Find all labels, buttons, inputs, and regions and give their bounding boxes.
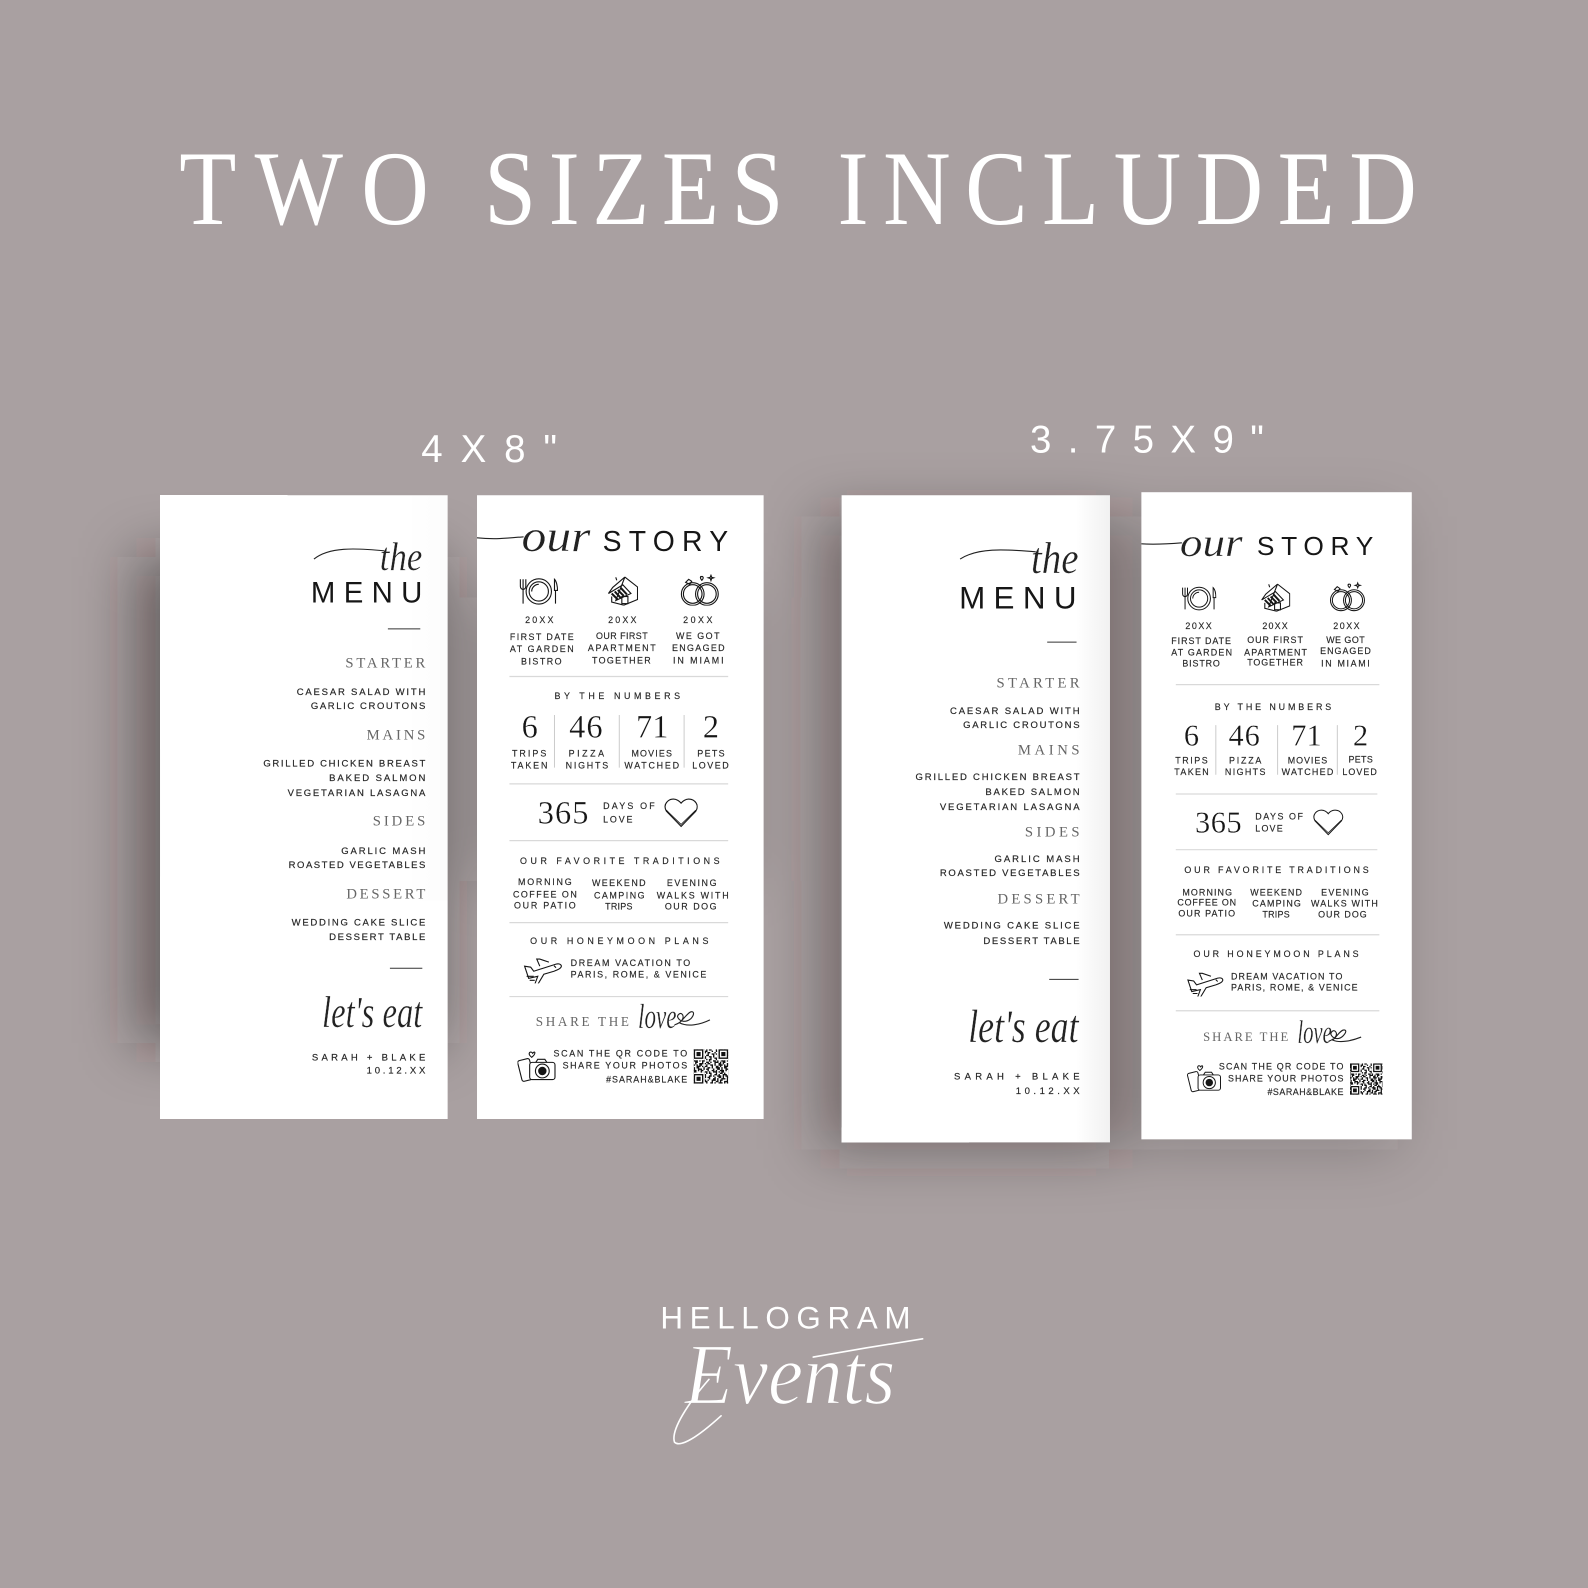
script heading: the: the <box>380 534 422 579</box>
menu items: GARLIC CROUTONS <box>963 720 1080 731</box>
numbers row: 71 <box>1291 718 1322 752</box>
size label: 4x8: 4X8" <box>421 428 557 471</box>
numbers row <box>511 709 729 771</box>
days of love: 365 <box>538 795 588 831</box>
logo wordmark: HELLOGRAM <box>660 1301 910 1336</box>
heading: our story: STORY <box>603 526 728 558</box>
milestones: AT GARDEN <box>1171 647 1232 657</box>
milestones: FIRST DATE <box>1171 636 1231 646</box>
names and date: 10.12.XX <box>1016 1086 1080 1097</box>
card background <box>842 495 1110 1142</box>
traditions: TRIPS <box>605 901 633 911</box>
days of love: DAYS OF <box>603 801 655 811</box>
menu items <box>916 676 1080 947</box>
script: let's eat: let's eat <box>968 1001 1079 1053</box>
menu items: GRILLED CHICKEN BREAST <box>263 759 426 770</box>
milestones: ENGAGED <box>1320 646 1371 656</box>
numbers row: PIZZA <box>1229 756 1261 766</box>
share the love: love <box>638 998 677 1036</box>
icon: plane <box>1188 973 1223 997</box>
size label: 3.75x9: 3.75X9" <box>1030 419 1264 462</box>
qr instructions: SCAN THE QR CODE TO <box>553 1048 687 1058</box>
milestones <box>510 615 725 666</box>
icon: rings <box>681 575 718 605</box>
traditions: EVENING <box>667 878 717 888</box>
icon: plane <box>525 959 561 984</box>
milestones: FIRST DATE <box>510 632 574 642</box>
menu items: CAESAR SALAD WITH <box>950 706 1080 717</box>
script heading: the <box>314 534 422 579</box>
menu items: SIDES <box>373 813 425 829</box>
menu items: MAINS <box>367 727 425 743</box>
heading: menu: MENU <box>959 581 1077 616</box>
traditions <box>1177 865 1378 920</box>
qr code <box>1334 1063 1383 1095</box>
icon: rings <box>1330 583 1364 611</box>
menu items: DESSERT TABLE <box>329 932 425 943</box>
traditions: WALKS WITH <box>1311 898 1378 908</box>
milestones: 20XX <box>1262 621 1288 631</box>
days of love <box>538 795 655 831</box>
qr instructions: #SARAH&BLAKE <box>1267 1087 1343 1097</box>
menu items: ROASTED VEGETABLES <box>289 860 425 871</box>
qr instructions <box>1219 1061 1343 1097</box>
traditions: OUR FAVORITE TRADITIONS <box>520 856 720 866</box>
logo: hellogram events <box>660 1301 923 1444</box>
numbers row: 71 <box>636 709 668 745</box>
traditions: OUR DOG <box>1318 910 1367 920</box>
numbers row: TAKEN <box>511 761 547 771</box>
traditions: OUR PATIO <box>514 900 576 910</box>
milestones: OUR FIRST <box>596 631 648 641</box>
heading: our story: our <box>522 511 591 561</box>
share the love: SHARE THE <box>1203 1030 1288 1044</box>
milestones: IN MIAMI <box>673 655 724 665</box>
menu items: BAKED SALMON <box>329 773 425 784</box>
milestones: ENGAGED <box>672 643 725 653</box>
traditions: CAMPING <box>1252 898 1301 908</box>
icon: house <box>1262 584 1290 611</box>
panel: 4x8 menu card <box>160 495 448 1119</box>
traditions: WALKS WITH <box>657 890 729 900</box>
menu items: MAINS <box>1018 743 1080 759</box>
menu items: CAESAR SALAD WITH <box>297 687 425 698</box>
milestones: TOGETHER <box>1247 657 1303 667</box>
milestones: WE GOT <box>1326 635 1365 645</box>
card edge shading <box>405 495 448 900</box>
logo script: Events <box>683 1326 895 1423</box>
milestones: APARTMENT <box>1244 647 1308 657</box>
traditions: MORNING <box>518 877 572 887</box>
names and date: SARAH + BLAKE <box>312 1052 425 1063</box>
section heading: by the numbers: BY THE NUMBERS <box>554 691 680 701</box>
milestones: AT GARDEN <box>510 644 574 654</box>
numbers row: TRIPS <box>512 749 546 759</box>
numbers row: NIGHTS <box>566 761 608 771</box>
traditions: TRIPS <box>1262 910 1290 920</box>
icon: fork and plate <box>1183 587 1216 610</box>
menu items: STARTER <box>997 676 1080 692</box>
qr instructions: SHARE YOUR PHOTOS <box>1228 1074 1343 1084</box>
card background <box>477 495 764 1119</box>
numbers row: 2 <box>1353 718 1368 752</box>
numbers row: 46 <box>1228 718 1260 752</box>
milestones: BISTRO <box>1182 658 1220 668</box>
traditions: MORNING <box>1182 887 1232 897</box>
heading: our story: our <box>1180 520 1243 565</box>
menu items: WEDDING CAKE SLICE <box>292 918 425 929</box>
traditions: EVENING <box>1321 887 1369 897</box>
honeymoon text: DREAM VACATION TO <box>571 958 690 968</box>
icon: heart <box>1314 810 1343 835</box>
days of love: LOVE <box>1255 823 1283 833</box>
honeymoon text <box>1231 971 1358 992</box>
traditions: WEEKEND <box>592 878 646 888</box>
menu items: GARLIC CROUTONS <box>311 701 425 712</box>
title <box>179 129 1417 247</box>
honeymoon text <box>571 958 706 979</box>
heading: our story <box>1141 520 1373 565</box>
menu items: VEGETARIAN LASAGNA <box>940 802 1080 813</box>
menu items <box>263 655 426 943</box>
menu items: SIDES <box>1025 825 1080 841</box>
names and date <box>312 1052 426 1077</box>
heading: our story <box>477 511 728 561</box>
numbers row <box>1174 718 1377 777</box>
title: TWO <box>179 129 429 247</box>
icon: camera <box>1187 1066 1220 1092</box>
card background <box>160 495 448 1119</box>
traditions: COFFEE ON <box>1177 897 1236 907</box>
script heading: the <box>960 533 1079 583</box>
menu items: DESSERT <box>346 886 425 902</box>
menu items: WEDDING CAKE SLICE <box>944 921 1080 932</box>
share the love <box>536 998 710 1036</box>
script: let's eat: let's eat <box>322 987 424 1037</box>
card shadows <box>137 517 1398 1149</box>
traditions: OUR DOG <box>665 901 717 911</box>
numbers row: WATCHED <box>1282 767 1333 777</box>
numbers row: PETS <box>1348 755 1373 765</box>
numbers row: 6 <box>1184 718 1199 752</box>
qr instructions: SCAN THE QR CODE TO <box>1219 1061 1343 1071</box>
milestones: APARTMENT <box>588 643 656 653</box>
script heading: the: the <box>1031 533 1079 583</box>
heading: our story: STORY <box>1257 531 1373 561</box>
title: INCLUDED <box>838 129 1417 247</box>
numbers row: PIZZA <box>569 749 604 759</box>
icon: heart <box>665 799 697 826</box>
milestones: 20XX <box>683 615 713 625</box>
traditions: COFFEE ON <box>513 889 577 899</box>
heading: menu: MENU <box>311 577 422 610</box>
traditions: CAMPING <box>594 890 645 900</box>
menu items: GARLIC MASH <box>995 854 1080 865</box>
numbers row: MOVIES <box>1288 756 1327 766</box>
menu items: VEGETARIAN LASAGNA <box>288 788 426 799</box>
numbers row: NIGHTS <box>1225 767 1265 777</box>
traditions: OUR PATIO <box>1178 909 1235 919</box>
menu items: DESSERT <box>998 891 1080 907</box>
numbers row: PETS <box>697 749 725 759</box>
honeymoon heading: OUR HONEYMOON PLANS <box>1194 949 1359 959</box>
menu items: STARTER <box>345 655 426 671</box>
days of love: 365 <box>1195 805 1242 839</box>
days of love: DAYS OF <box>1255 811 1303 821</box>
share the love <box>1203 1015 1361 1051</box>
menu items: ROASTED VEGETABLES <box>940 868 1080 879</box>
icon: camera <box>517 1052 555 1082</box>
title: SIZES <box>484 129 784 247</box>
honeymoon text: PARIS, ROME, & VENICE <box>1231 982 1358 992</box>
numbers row: 2 <box>703 709 719 745</box>
names and date <box>954 1072 1080 1097</box>
section heading: by the numbers: BY THE NUMBERS <box>1215 702 1331 712</box>
days of love: LOVE <box>603 814 633 824</box>
numbers row: TRIPS <box>1175 756 1208 766</box>
milestones: TOGETHER <box>592 655 651 665</box>
share the love: SHARE THE <box>536 1014 629 1029</box>
share the love: love <box>1297 1015 1332 1051</box>
names and date: 10.12.XX <box>367 1066 426 1077</box>
traditions: OUR FAVORITE TRADITIONS <box>1184 865 1369 875</box>
menu items: DESSERT TABLE <box>983 936 1080 947</box>
top rule <box>388 628 420 630</box>
honeymoon text: PARIS, ROME, & VENICE <box>571 969 706 979</box>
numbers row: 46 <box>569 709 603 745</box>
milestones: 20XX <box>1333 621 1360 631</box>
numbers row: 6 <box>522 709 538 745</box>
honeymoon heading: OUR HONEYMOON PLANS <box>530 936 708 946</box>
qr code <box>676 1049 730 1084</box>
milestones: 20XX <box>525 615 554 625</box>
numbers row: WATCHED <box>624 761 679 771</box>
icon: fork and plate <box>520 579 558 604</box>
milestones: OUR FIRST <box>1247 635 1303 645</box>
menu items: BAKED SALMON <box>985 787 1080 798</box>
numbers row: TAKEN <box>1174 767 1209 777</box>
panel: 4x8 story card <box>477 495 764 1119</box>
panel: 3.75x9 menu card <box>842 495 1110 1142</box>
milestones: IN MIAMI <box>1321 658 1370 668</box>
milestones: 20XX <box>608 615 637 625</box>
days of love <box>1195 805 1303 839</box>
bottom rule <box>390 967 422 969</box>
traditions: WEEKEND <box>1250 887 1302 897</box>
card edge shading <box>1076 495 1110 1142</box>
milestones: BISTRO <box>521 656 562 666</box>
milestones: 20XX <box>1185 621 1212 631</box>
card background <box>1141 492 1412 1139</box>
names and date: SARAH + BLAKE <box>954 1072 1080 1083</box>
menu items: GRILLED CHICKEN BREAST <box>916 772 1080 783</box>
top rule <box>1047 641 1077 643</box>
honeymoon text: DREAM VACATION TO <box>1231 971 1342 981</box>
numbers row: MOVIES <box>631 749 672 759</box>
traditions <box>513 856 729 911</box>
menu items: GARLIC MASH <box>341 846 425 857</box>
qr instructions <box>553 1048 687 1085</box>
qr instructions: #SARAH&BLAKE <box>606 1075 687 1085</box>
milestones: WE GOT <box>676 631 720 641</box>
panel: 3.75x9 story card <box>1141 492 1412 1139</box>
numbers row: LOVED <box>692 761 729 771</box>
numbers row: LOVED <box>1342 767 1377 777</box>
milestones <box>1171 621 1371 668</box>
qr instructions: SHARE YOUR PHOTOS <box>563 1060 687 1070</box>
bottom rule <box>1049 978 1079 980</box>
icon: house <box>608 577 638 605</box>
